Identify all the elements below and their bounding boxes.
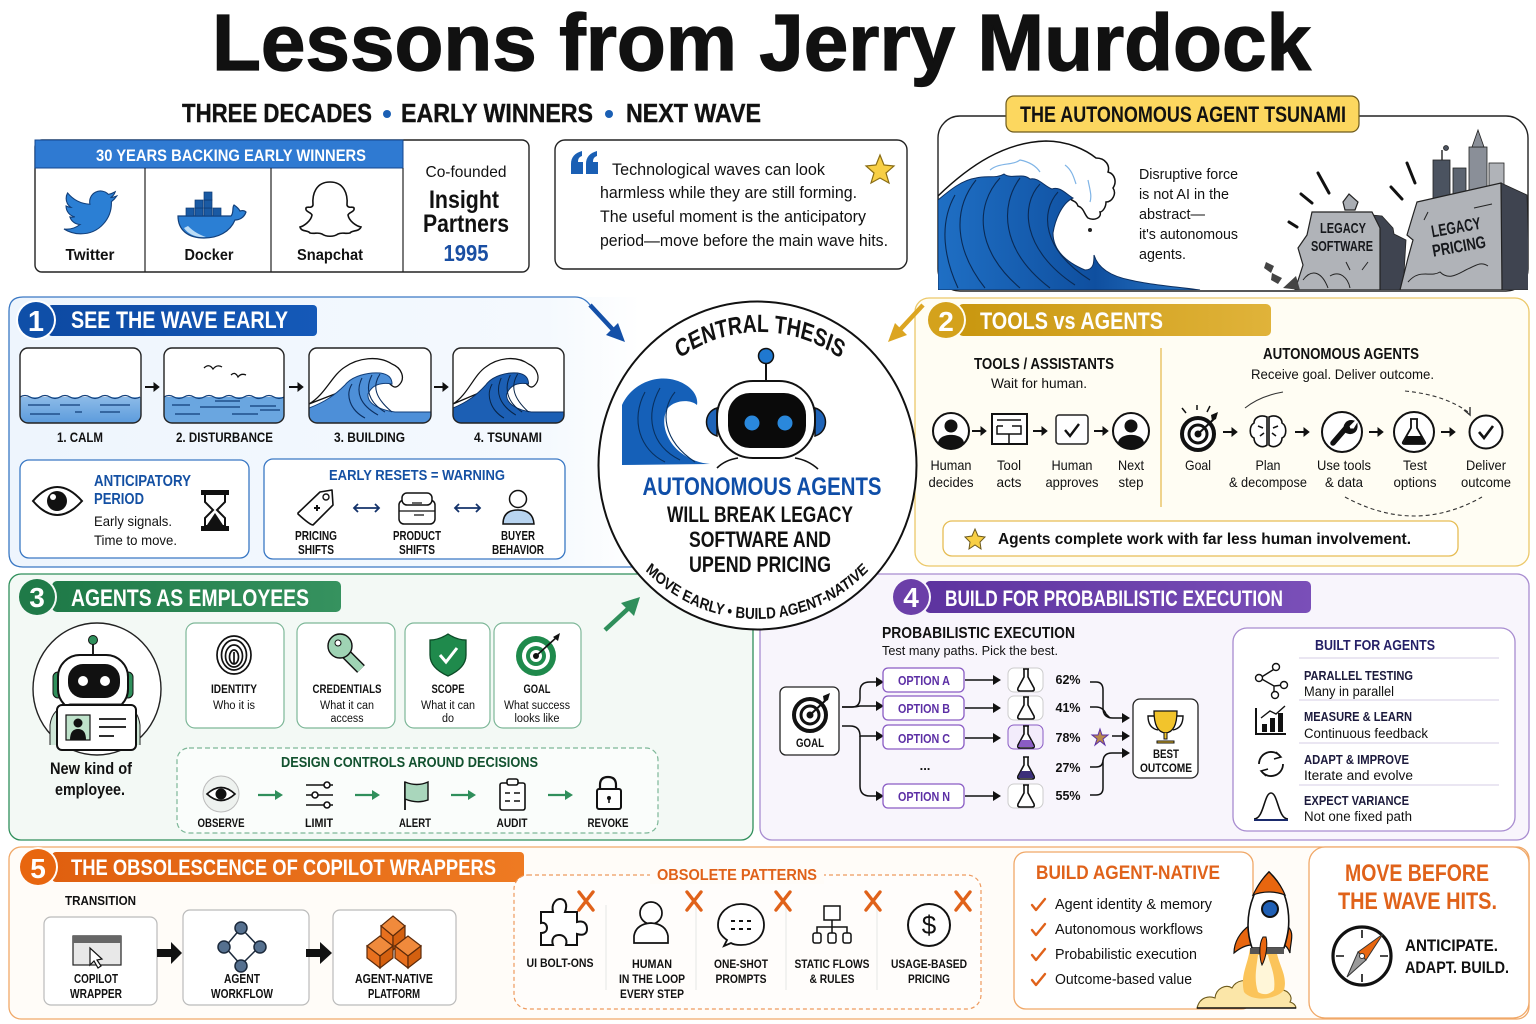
anticipatory text: PERIOD (94, 491, 144, 508)
row: parallel testing: Many in parallel (1304, 684, 1394, 699)
insight partners text: Co-founded (426, 164, 506, 181)
quote text: period—move before the main wave hits. (600, 231, 888, 250)
subheading: PROBABILISTIC EXECUTION (882, 625, 1075, 642)
control labels: LIMIT (305, 816, 334, 830)
icon: alert flag (405, 782, 428, 810)
stage arrows (145, 383, 448, 391)
icon: observe (203, 776, 239, 812)
panel 4: build for probabilistic execution (760, 574, 1529, 840)
icon: parallel nodes (1256, 664, 1288, 698)
insight partners text (423, 164, 509, 266)
control labels: AUDIT (496, 816, 528, 830)
agents labels: & data (1325, 474, 1363, 490)
row: expect variance: EXPECT VARIANCE (1304, 793, 1409, 808)
checklist: Probabilistic execution (1055, 947, 1197, 963)
tools heading: Wait for human. (991, 375, 1087, 391)
company labels: Snapchat (297, 247, 364, 264)
panel 1: see the wave early (8, 296, 1530, 1020)
early resets labels: SHIFTS (298, 543, 334, 557)
caption: new kind of employee: employee. (55, 781, 125, 799)
option a row (883, 668, 1081, 692)
text: disruptive force: is not AI in the (1139, 187, 1229, 203)
row: measure and learn (1304, 709, 1428, 741)
option b row (883, 696, 1081, 720)
subheading (882, 625, 1075, 658)
caption: new kind of employee: New kind of (50, 760, 132, 778)
card: credentials: What it can (320, 700, 374, 712)
insight partners text: 1995 (444, 240, 489, 266)
insight partners text: Insight (429, 186, 500, 214)
merge arrowheads and star (1092, 713, 1130, 758)
stage labels (57, 430, 542, 445)
agents labels: options (1394, 474, 1436, 490)
early resets labels: SHIFTS (399, 543, 435, 557)
arrow: blue to thesis (590, 305, 625, 342)
central thesis circle (598, 300, 918, 630)
quote text: harmless while they are still forming. (600, 183, 857, 202)
section header (926, 300, 1271, 340)
transition label: TRANSITION (65, 893, 136, 908)
card: goal: What success (504, 700, 570, 712)
tools labels: approves (1046, 474, 1098, 490)
subheading: Test many paths. Pick the best. (882, 643, 1058, 658)
section header: THE OBSOLESCENCE OF COPILOT WRAPPERS (71, 855, 496, 880)
icon: trophy (1148, 711, 1183, 743)
omitted row: 27% (1056, 760, 1081, 775)
illustration: central robot (706, 348, 826, 469)
illustration: disturbance (164, 348, 284, 423)
thesis text: SOFTWARE AND (689, 527, 831, 552)
anticipatory period card (20, 460, 249, 558)
icon: wrench (1322, 412, 1362, 452)
agents heading (1251, 346, 1434, 382)
move before card: ANTICIPATE. (1405, 937, 1498, 955)
text: disruptive force (1139, 167, 1238, 263)
tools labels: acts (996, 474, 1022, 490)
icon: audit clipboard (500, 779, 525, 810)
section header: 2 (938, 306, 954, 337)
pattern: human in the loop: HUMAN (632, 957, 672, 971)
header band: 30 YEARS BACKING EARLY WINNERS (96, 146, 366, 165)
anticipatory text: Time to move. (94, 532, 177, 548)
illustration: legacy pricing block (1391, 163, 1530, 290)
icon: price tag (298, 490, 333, 525)
thesis text: WILL BREAK LEGACY (667, 502, 853, 527)
row: parallel testing (1304, 668, 1413, 699)
subtitle (182, 98, 761, 128)
pattern: human in the loop (619, 892, 701, 1001)
option n row: OPTION N (898, 789, 950, 804)
card: identity: Who it is (213, 700, 255, 712)
checklist: Outcome-based value (1055, 972, 1192, 988)
arrow: green to thesis (605, 597, 640, 630)
card: scope: SCOPE (432, 682, 464, 696)
icon: hourglass (201, 490, 229, 531)
illustration: legacy pricing block: LEGACY (1430, 214, 1483, 241)
callout (943, 521, 1458, 556)
control arrows (258, 790, 573, 800)
build agent-native card: BUILD AGENT-NATIVE (1036, 863, 1220, 884)
early resets labels (295, 529, 544, 557)
tools labels (928, 457, 1144, 490)
row: expect variance: Not one fixed path (1304, 809, 1412, 824)
section header (17, 577, 341, 617)
header band (35, 140, 403, 168)
stage labels: 3. BUILDING (334, 430, 405, 445)
thesis text: UPEND PRICING (689, 552, 831, 577)
subtitle: NEXT WAVE (626, 98, 761, 128)
option a row: OPTION A (898, 673, 951, 688)
tools labels: decides (928, 474, 974, 490)
early resets card: EARLY RESETS = WARNING (329, 467, 505, 484)
early resets labels: BEHAVIOR (492, 543, 544, 557)
merging connectors (1090, 682, 1124, 795)
anticipatory text (94, 473, 192, 548)
agents labels: Use tools (1317, 457, 1371, 473)
illustration: legacy software block: LEGACY (1320, 220, 1366, 237)
tools heading: TOOLS / ASSISTANTS (974, 356, 1114, 373)
tools labels: Human (930, 457, 972, 473)
goal box (780, 687, 839, 755)
illustration: rocket (1197, 872, 1296, 1008)
icon: star (866, 155, 894, 183)
id badge (50, 704, 140, 750)
icon: revoke padlock (597, 777, 621, 809)
icon: double arrows (354, 504, 480, 512)
pattern: one-shot prompts: PROMPTS (716, 972, 766, 986)
arrow: gold to thesis (888, 305, 923, 342)
row: adapt and improve: ADAPT & IMPROVE (1304, 752, 1409, 767)
section header (16, 300, 317, 340)
subtitle: THREE DECADES (182, 98, 372, 128)
section header (891, 577, 1311, 617)
agents labels: outcome (1461, 474, 1511, 490)
pattern: static flows: & RULES (810, 972, 854, 986)
arrow (157, 942, 182, 964)
section header: 4 (903, 582, 919, 613)
agents labels: Test (1403, 457, 1427, 473)
omitted row: ... (920, 758, 930, 773)
pattern: ui bolt-ons (526, 892, 594, 970)
illustration: legacy software block (1264, 173, 1406, 290)
section header: BUILD FOR PROBABILISTIC EXECUTION (945, 586, 1283, 611)
agents heading: AUTONOMOUS AGENTS (1263, 346, 1419, 363)
section header: TOOLS vs AGENTS (980, 308, 1163, 335)
card: identity (186, 623, 284, 728)
section header: AGENTS AS EMPLOYEES (71, 585, 309, 612)
icon: snapchat ghost (300, 182, 361, 236)
heading pill: THE AUTONOMOUS AGENT TSUNAMI (1020, 102, 1346, 127)
pattern: usage-based pricing (891, 892, 970, 986)
design controls box: DESIGN CONTROLS AROUND DECISIONS (281, 754, 538, 771)
agents heading: Receive goal. Deliver outcome. (1251, 366, 1434, 382)
goal box: GOAL (796, 736, 824, 750)
option n row (883, 784, 1081, 808)
agents labels: Deliver (1466, 457, 1506, 473)
branching connectors (842, 682, 878, 796)
anticipatory text: Early signals. (94, 513, 172, 529)
early resets card (264, 459, 565, 559)
option a row: 62% (1056, 672, 1081, 687)
agents labels: Goal (1185, 457, 1211, 473)
arrow (306, 942, 332, 964)
icon: docker whale (178, 192, 246, 238)
move before card (1309, 847, 1529, 1018)
anticipatory text: ANTICIPATORY (94, 473, 192, 490)
card: goal (494, 623, 581, 728)
omitted row (920, 757, 1081, 779)
card: goal: looks like (514, 713, 560, 725)
move before card: ADAPT. BUILD. (1405, 959, 1509, 977)
company labels (66, 247, 364, 264)
tools heading (974, 356, 1114, 391)
pattern: usage-based pricing: USAGE-BASED (891, 957, 967, 971)
icon: product stack (399, 493, 435, 524)
row: adapt and improve (1304, 752, 1413, 783)
icon: adapt cycle (1259, 752, 1283, 776)
illustration: building wave (309, 348, 431, 423)
icon: buyer (503, 490, 534, 524)
connector arrowheads (876, 677, 884, 801)
icon: compass (1333, 927, 1391, 985)
callout: Agents complete work with far less human involvement. (998, 531, 1411, 548)
card: identity: IDENTITY (211, 682, 257, 696)
company labels: Twitter (66, 247, 114, 264)
checklist (1032, 897, 1213, 988)
illustration: tsunami wave (938, 141, 1200, 290)
card: agent native platform (333, 910, 456, 1005)
early resets labels: PRICING (295, 529, 337, 543)
card: scope: What it can (421, 700, 475, 712)
caption: new kind of employee (50, 760, 132, 799)
icon: bar chart (1256, 706, 1286, 734)
card: goal: GOAL (524, 682, 550, 696)
best outcome box (1133, 699, 1198, 778)
option c row: OPTION C (898, 731, 950, 746)
built for agents card (1233, 628, 1515, 831)
section header: 5 (30, 853, 46, 884)
pattern: ui bolt-ons: UI BOLT-ONS (526, 956, 594, 970)
panel 5: obsolescence of copilot wrappers (9, 847, 1529, 1019)
icon: test flask (1394, 412, 1434, 452)
card: agent native platform: AGENT-NATIVE (355, 972, 433, 986)
thesis text: AUTONOMOUS AGENTS (642, 473, 882, 501)
pattern: static flows (794, 892, 880, 986)
control labels: REVOKE (588, 816, 628, 830)
agents labels: & decompose (1229, 474, 1307, 490)
curved heading: CENTRAL THESIS (676, 314, 845, 356)
early resets labels: PRODUCT (393, 529, 441, 543)
move before card: MOVE BEFORE (1345, 860, 1489, 887)
insight partners text: Partners (423, 210, 509, 238)
icon: twitter bird (64, 191, 117, 234)
stage labels: 4. TSUNAMI (474, 430, 542, 445)
text: disruptive force: Disruptive force (1139, 167, 1238, 183)
illustration: legacy software block: SOFTWARE (1311, 238, 1373, 255)
tools labels: Tool (997, 457, 1021, 473)
quote text (600, 160, 888, 250)
option b row: OPTION B (898, 701, 950, 716)
move before card: THE WAVE HITS. (1338, 888, 1497, 915)
company labels: Docker (184, 247, 234, 264)
illustration: tsunami (453, 348, 564, 423)
pattern: one-shot prompts: ONE-SHOT (714, 957, 769, 971)
row: expect variance (1304, 793, 1412, 824)
card: agent native platform: PLATFORM (368, 987, 420, 1001)
panel: 30 years backing early winners (35, 140, 529, 272)
obsolete patterns box (514, 867, 981, 1009)
illustration: calm (20, 348, 141, 423)
illustration: skyline (1433, 130, 1504, 198)
section header: 3 (29, 582, 45, 613)
pattern: usage-based pricing: PRICING (908, 972, 950, 986)
checklist: Agent identity & memory (1055, 897, 1213, 913)
row: measure and learn: Continuous feedback (1304, 726, 1428, 741)
control labels: ALERT (399, 816, 432, 830)
panel: quote (555, 140, 907, 269)
illustration: central wave (622, 379, 710, 465)
section header: SEE THE WAVE EARLY (71, 307, 288, 334)
pattern: one-shot prompts (714, 892, 790, 986)
text: disruptive force: it's autonomous (1139, 227, 1238, 243)
agents labels (1185, 457, 1511, 490)
design controls box (177, 748, 658, 833)
card: credentials: access (330, 713, 364, 725)
row: measure and learn: MEASURE & LEARN (1304, 709, 1412, 724)
row: parallel testing: PARALLEL TESTING (1304, 668, 1413, 683)
card: copilot wrapper: WRAPPER (70, 987, 122, 1001)
checklist: Autonomous workflows (1055, 922, 1203, 938)
heading pill (1006, 96, 1359, 132)
stage labels: 1. CALM (57, 430, 103, 445)
tools labels: step (1118, 474, 1144, 490)
panel: autonomous agent tsunami (938, 96, 1530, 291)
card: agent workflow: WORKFLOW (211, 987, 273, 1001)
option b row: 41% (1056, 700, 1081, 715)
best outcome box: BEST (1153, 747, 1180, 761)
obsolete heading: OBSOLETE PATTERNS (657, 867, 817, 884)
build agent-native card (1014, 852, 1253, 1009)
quote text: The useful moment is the anticipatory (600, 207, 866, 226)
option c row (883, 725, 1081, 749)
illustration: robot with id badge (33, 623, 161, 755)
card: scope (405, 623, 490, 728)
pattern: usage-based pricing: $ (922, 910, 937, 940)
tools flow (933, 413, 1149, 449)
text: disruptive force: abstract— (1139, 207, 1205, 223)
curved flow arrows (1245, 391, 1482, 516)
card: credentials (297, 623, 395, 728)
icon: orange cubes (367, 916, 421, 968)
icon: deliver check (1470, 416, 1502, 448)
card: agent workflow: AGENT (224, 972, 260, 986)
control labels: OBSERVE (198, 816, 244, 830)
icon: quote mark (571, 151, 598, 174)
stage labels: 2. DISTURBANCE (176, 430, 273, 445)
pattern: static flows: STATIC FLOWS (794, 957, 870, 971)
panel 2: tools vs agents (915, 298, 1529, 566)
agents flow (1182, 405, 1502, 452)
option c row: 78% (1056, 730, 1081, 745)
option n row: 55% (1056, 788, 1081, 803)
illustration: legacy pricing block: PRICING (1431, 233, 1487, 261)
text: disruptive force: agents. (1139, 247, 1186, 263)
tools labels: Next (1118, 457, 1144, 473)
card: credentials: CREDENTIALS (312, 682, 382, 696)
subtitle: EARLY WINNERS (401, 98, 593, 128)
tools labels: Human (1052, 457, 1092, 473)
card: copilot wrapper (44, 917, 157, 1005)
control labels (198, 816, 628, 830)
icon: limit sliders (306, 782, 333, 808)
built for agents card: BUILT FOR AGENTS (1315, 638, 1435, 654)
curved tagline: MOVE EARLY • BUILD AGENT-NATIVE (646, 562, 868, 619)
pattern: human in the loop: IN THE LOOP (619, 972, 685, 986)
agents labels: Plan (1256, 457, 1280, 473)
card: agent workflow (183, 910, 309, 1005)
thesis text (642, 473, 882, 577)
early resets labels: BUYER (501, 529, 535, 543)
row: adapt and improve: Iterate and evolve (1304, 768, 1413, 783)
icon: brain (1250, 416, 1286, 447)
card: copilot wrapper: COPILOT (74, 972, 118, 986)
pattern: human in the loop: EVERY STEP (620, 987, 684, 1001)
section header (18, 847, 524, 887)
icon: eye (33, 487, 82, 515)
quote text: Technological waves can look (612, 160, 825, 179)
best outcome box: OUTCOME (1140, 761, 1192, 775)
card: scope: do (442, 713, 454, 725)
title: Lessons from Jerry Murdock (212, 0, 1312, 87)
icon: bell curve (1254, 793, 1288, 820)
section header: 1 (28, 306, 44, 338)
